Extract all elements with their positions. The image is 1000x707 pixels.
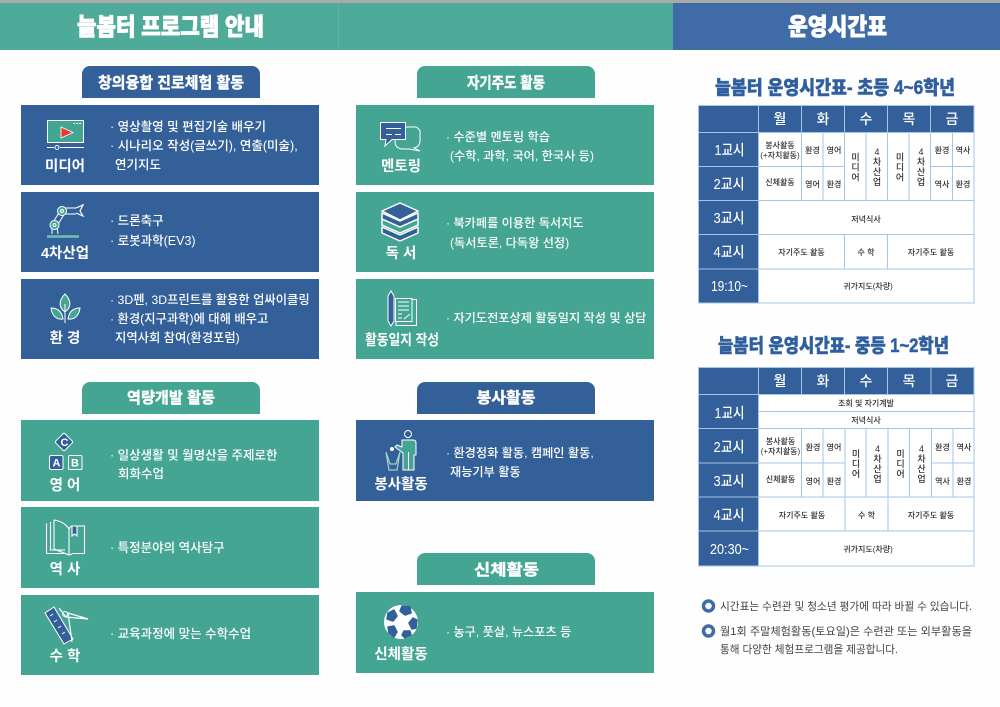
header: program guide: 늘봄터 프로그램 안내 [77, 14, 264, 41]
table: elementary timetable: 환경 [805, 145, 820, 155]
section tab: creative career activities: 창의융합 진로체험 활동 [98, 74, 244, 92]
table: middle school timetable: 환경 [935, 442, 950, 452]
table: elementary timetable: 디 [851, 162, 860, 172]
table: middle school timetable: 미 [852, 449, 860, 459]
table: middle school timetable: 자기주도 활동 [908, 510, 954, 520]
table: elementary timetable: 봉사활동 [765, 140, 795, 150]
header: timetable: 운영시간표 [788, 14, 887, 41]
table: elementary timetable: 3교시 [714, 210, 744, 227]
label: volunteer: 봉사활동 [374, 476, 428, 493]
table: middle school timetable: 귀가지도(차량) [843, 544, 893, 554]
table: middle school timetable: 어 [896, 469, 905, 479]
text: volunteer details: 재능기부 활동 [450, 464, 521, 479]
panel: english [21, 420, 319, 501]
table: elementary timetable: 금 [946, 111, 959, 127]
table: elementary timetable: 산 [917, 167, 925, 177]
table: middle school timetable: 환경 [957, 476, 971, 486]
table: middle school timetable: 업 [873, 473, 882, 484]
panel: volunteer [356, 420, 654, 501]
table: elementary timetable: 차 [873, 156, 882, 167]
table: middle school timetable: 월 [774, 373, 786, 389]
header: timetable [673, 3, 1000, 50]
section tab: competency activities: 역량개발 활동 [127, 389, 215, 407]
table: elementary timetable: 환경 [935, 145, 949, 155]
table: elementary timetable: 영어 [805, 179, 820, 189]
panel: reading [356, 192, 654, 272]
label: history: 역 사 [50, 561, 81, 578]
label: mentoring: 멘토링 [381, 158, 421, 175]
icon: letter blocks: A [53, 458, 61, 470]
label: media: 미디어 [45, 158, 85, 175]
text: reading details: (독서토론, 다독왕 선정) [450, 236, 569, 250]
table: elementary timetable: 자기주도 활동 [778, 247, 825, 257]
table: elementary timetable: 19:10~ [711, 278, 748, 295]
panel: activity log [356, 279, 654, 359]
table: elementary timetable: (+자치활동) [760, 150, 800, 160]
table: elementary timetable: 수 [860, 111, 873, 127]
text: english details: 회화수업 [118, 467, 164, 481]
table: middle school timetable: (+자치활동) [761, 446, 801, 456]
text: english details: · 일상생활 및 월명산을 주제로한 [110, 448, 278, 462]
table: elementary timetable: 환경 [956, 179, 970, 189]
table: elementary timetable: 업 [873, 176, 881, 187]
table: elementary timetable: 4 [918, 147, 924, 157]
table: elementary timetable: 미 [896, 152, 904, 162]
panel: history [21, 507, 319, 588]
section tab: physical activities [417, 553, 595, 585]
icon: ruler and compass [45, 607, 88, 644]
label: math: 수 학 [50, 648, 80, 665]
table: elementary timetable: 화 [817, 111, 830, 127]
table: elementary timetable: 업 [917, 176, 925, 187]
table: middle school timetable: 환경 [806, 442, 820, 452]
text: environment details: 지역사회 참여(환경포럼) [115, 331, 240, 345]
table: elementary timetable: 역사 [935, 179, 950, 189]
section tab: self-directed activities: 자기주도 활동 [467, 74, 545, 92]
text: volunteer details: · 환경정화 활동, 캠페인 활동, [446, 445, 594, 460]
icon: book stack [382, 203, 418, 241]
table: middle school timetable: 디 [852, 459, 860, 469]
table: middle school timetable: 역사 [957, 442, 972, 452]
table: middle school timetable: 2교시 [714, 439, 744, 456]
table: middle school timetable: 업 [917, 473, 926, 484]
note: monthly weekend programme [704, 624, 972, 656]
icon: letter blocks [50, 433, 82, 470]
table: middle school timetable: 영어 [827, 442, 841, 452]
icon: pen and document [388, 291, 416, 326]
table: middle school timetable [698, 368, 974, 566]
text: mentoring details: (수학, 과학, 국어, 한국사 등) [450, 148, 594, 163]
label: english: 영 어 [50, 477, 80, 494]
text: media details: · 시나리오 작성(글쓰기), 연출(미술), [110, 139, 298, 153]
table: middle school timetable: 영어 [806, 476, 820, 486]
section tab: creative career activities [82, 66, 260, 98]
note: timetable may change: 시간표는 수련관 및 청소년 평가에 따라 바뀔 수 있습니다. [720, 600, 972, 613]
panel: environment [21, 279, 319, 359]
section tab: physical activities: 신체활동 [474, 561, 539, 579]
table: middle school timetable: 20:30~ [710, 541, 749, 558]
table: elementary timetable: 역사 [956, 145, 971, 155]
text: history details: · 특정분야의 역사탐구 [110, 541, 225, 555]
text: mentoring details: · 수준별 멘토링 학습 [446, 129, 550, 144]
table: elementary timetable: 미 [851, 152, 860, 162]
label: physical: 신체활동 [374, 646, 428, 663]
text: environment details: · 환경(지구과학)에 대해 배우고 [110, 311, 268, 326]
table: elementary timetable: 월 [774, 111, 786, 127]
table: middle school timetable: 봉사활동 [766, 436, 795, 446]
text: media details: 연기지도 [115, 158, 161, 172]
table: middle school timetable: 미 [896, 449, 905, 459]
table: middle school timetable: 4교시 [714, 507, 744, 524]
icon: speech bubbles [380, 122, 420, 151]
text: fourth industry details: · 드론축구 [110, 214, 164, 228]
table: elementary timetable: 목 [903, 111, 916, 127]
table: middle school timetable: 신체활동 [766, 474, 795, 484]
table: elementary timetable: 저녁식사 [851, 214, 881, 224]
table: elementary timetable: 환경 [827, 179, 841, 189]
table: middle school timetable: 산 [917, 464, 926, 474]
note: monthly weekend programme: 통해 다양한 체험프로그램을 제공합니다. [720, 642, 898, 656]
icon: video screen [47, 120, 84, 150]
table: elementary timetable: 영어 [827, 145, 841, 155]
table: middle school timetable: 조회 및 자기계발 [838, 398, 895, 408]
icon: soccer ball [384, 605, 418, 639]
table: elementary timetable: 어 [851, 172, 860, 182]
table: elementary timetable: 2교시 [714, 176, 744, 193]
table: elementary timetable [698, 106, 974, 303]
table: middle school timetable: 4 [875, 444, 880, 454]
icon: letter blocks: B [71, 458, 79, 470]
table: middle school timetable: 화 [817, 373, 830, 389]
table: middle school timetable: 수 [860, 373, 873, 389]
table: middle school timetable: 산 [873, 464, 882, 474]
table: middle school timetable: 저녁식사 [851, 415, 881, 425]
label: activity log: 활동일지 작성 [365, 332, 439, 349]
text: activity log details: · 자기도전포상제 활동일지 작성 및 상담 [446, 310, 646, 325]
text: reading details: · 북카페를 이용한 독서지도 [446, 216, 584, 230]
table: elementary timetable: 어 [896, 172, 904, 182]
header: program guide [0, 3, 673, 50]
table: middle school timetable: 자기주도 활동 [779, 510, 825, 520]
text: media details: · 영상촬영 및 편집기술 배우기 [110, 120, 266, 134]
icon: letter blocks: C [61, 437, 69, 449]
table: middle school timetable: 차 [873, 453, 882, 464]
icon: open book [46, 520, 84, 555]
panel: mentoring [356, 105, 654, 185]
panel: physical [356, 592, 654, 673]
heading: middle school timetable: 늘봄터 운영시간표- 중등 1~2학년 [718, 335, 949, 357]
table: elementary timetable: 산 [873, 167, 881, 177]
table: elementary timetable: 자기주도 활동 [908, 247, 954, 257]
text: math details: · 교육과정에 맞는 수학수업 [110, 626, 251, 641]
table: middle school timetable: 1교시 [714, 405, 744, 422]
table: elementary timetable: 4교시 [714, 244, 744, 261]
table: middle school timetable: 금 [946, 373, 959, 389]
table: middle school timetable: 차 [917, 453, 926, 464]
table: elementary timetable: 신체활동 [765, 177, 795, 187]
table: middle school timetable: 디 [896, 459, 905, 469]
table: middle school timetable: 4 [919, 444, 924, 454]
section tab: self-directed activities [417, 66, 595, 98]
panel: fourth industry [21, 192, 319, 272]
panel: media [21, 105, 319, 185]
icon: leaves [51, 294, 80, 323]
section tab: competency activities [82, 382, 260, 414]
icon: person with trash can [386, 430, 416, 470]
label: reading: 독 서 [386, 245, 416, 262]
table: middle school timetable: 어 [852, 469, 860, 479]
icon: robot arm [47, 205, 83, 236]
table: elementary timetable: 귀가지도(차량) [843, 281, 893, 291]
heading: elementary timetable: 늘봄터 운영시간표- 초등 4~6학년 [715, 77, 955, 99]
text: fourth industry details: · 로봇과학(EV3) [110, 233, 196, 248]
text: physical details: · 농구, 풋살, 뉴스포츠 등 [446, 625, 571, 639]
table: elementary timetable: 차 [917, 156, 926, 167]
table: elementary timetable: 1교시 [714, 142, 744, 159]
table: elementary timetable: 수 학 [858, 247, 875, 257]
table: elementary timetable: 디 [896, 162, 904, 172]
section tab: volunteer activities: 봉사활동 [476, 389, 536, 407]
label: environment: 환 경 [50, 330, 80, 347]
text: environment details: · 3D펜, 3D프린트를 활용한 업싸이클링 [110, 292, 310, 307]
table: middle school timetable: 3교시 [714, 473, 744, 490]
label: fourth industry: 4차산업 [41, 245, 89, 262]
table: middle school timetable: 환경 [827, 476, 841, 486]
table: elementary timetable: 4 [874, 147, 880, 157]
table: middle school timetable: 수 학 [858, 510, 876, 520]
section tab: volunteer activities [417, 382, 595, 414]
panel: math [21, 595, 319, 675]
table: middle school timetable: 목 [903, 373, 916, 389]
note: monthly weekend programme: 월1회 주말체험활동(토요일)은 수련관 또는 외부활동을 [720, 624, 972, 638]
table: middle school timetable: 역사 [935, 476, 950, 486]
